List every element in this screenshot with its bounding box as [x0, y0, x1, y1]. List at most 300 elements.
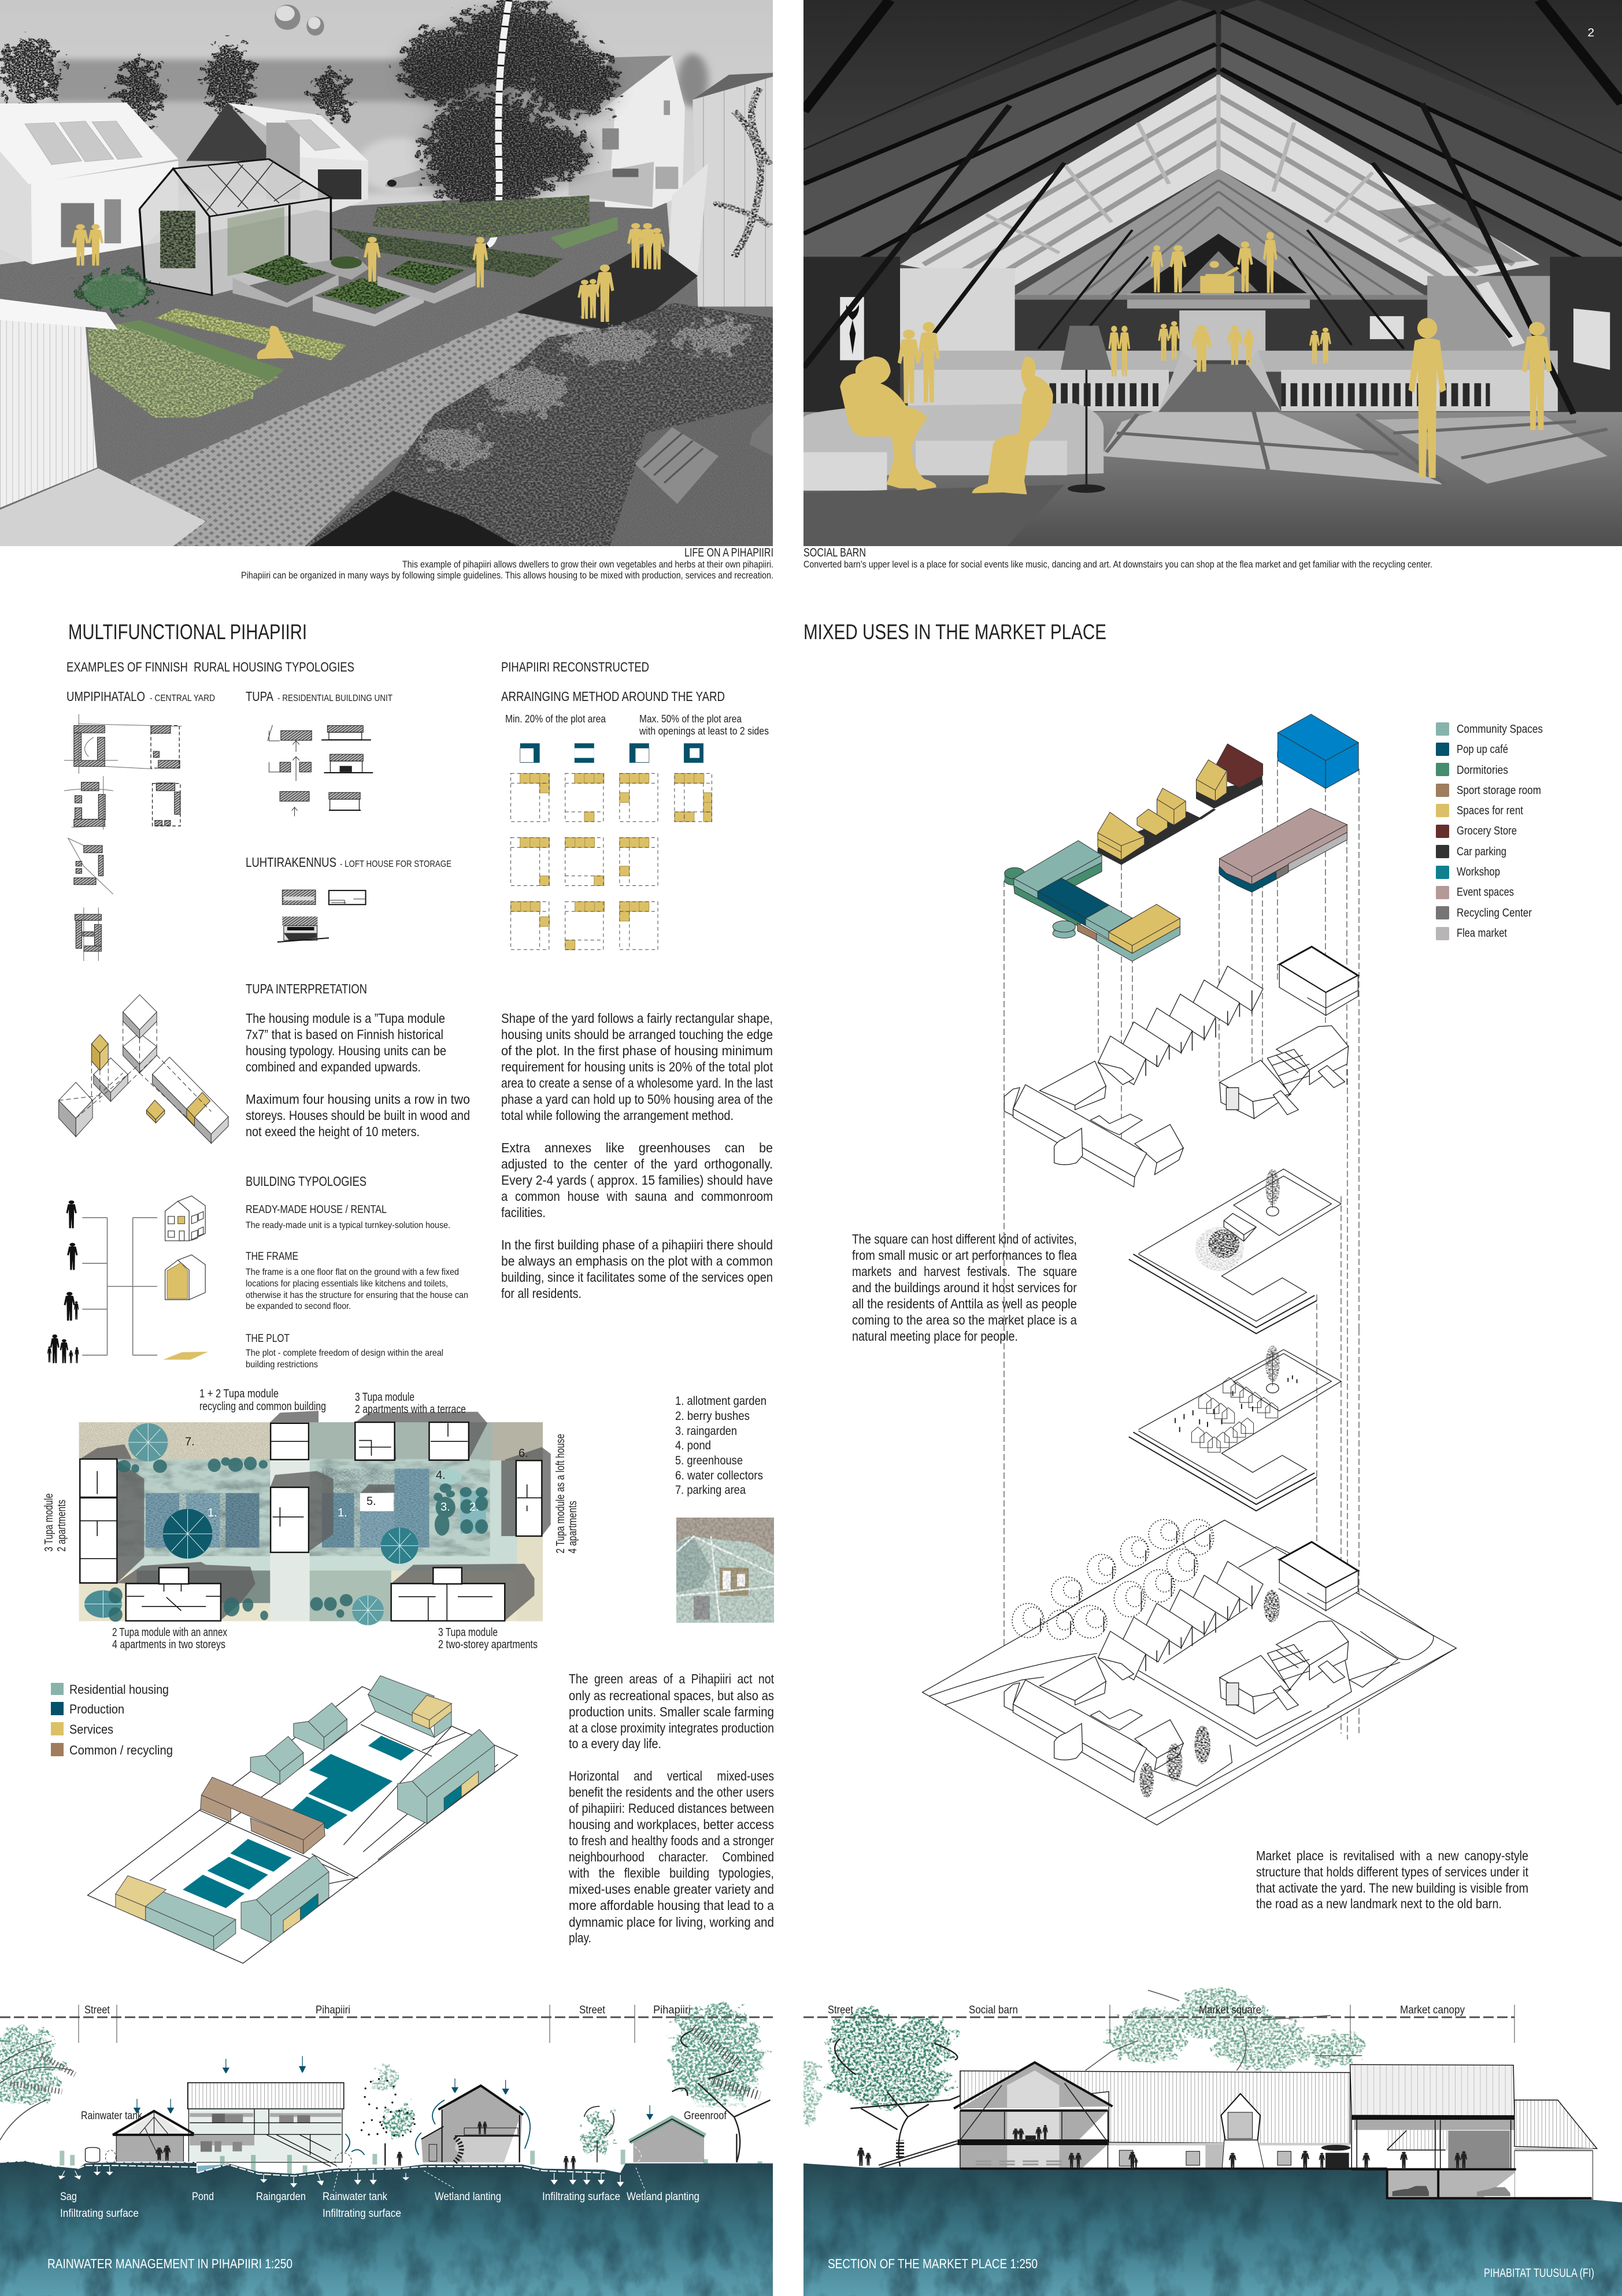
caption: social barn: Converted barn’s upper level is a place for social events like music, dancing and art. At downstairs you can shop at the flea market and get familiar with the recycling center.	[803, 559, 1432, 570]
site plan labels: recycling and common building	[199, 1400, 326, 1413]
text: shape of the yard: be always an emphasis on the plot with a common	[501, 1253, 773, 1268]
lawn	[0, 199, 773, 546]
site plan labels: 4 apartments in two storeys	[112, 1638, 225, 1651]
site plan labels: 4 apartments	[566, 1501, 579, 1553]
site plan labels: 4.	[436, 1469, 446, 1482]
right roof and wall	[1514, 2100, 1597, 2199]
heading: umpipihatalo	[66, 689, 215, 704]
caption: life on a pihapiiri	[241, 546, 773, 581]
gable house	[421, 2086, 523, 2163]
pond	[198, 2164, 225, 2173]
text: green areas: Horizontal and vertical mixed-uses	[569, 1768, 774, 1783]
shrubs	[305, 303, 773, 546]
site plan key: 6. water collectors	[675, 1469, 763, 1482]
trees	[84, 1423, 419, 1625]
site plan labels: 2 apartments	[55, 1500, 68, 1552]
cypress trees	[1139, 1590, 1280, 1798]
site plan key: 1. allotment garden	[675, 1394, 766, 1408]
section labels: right: Social barn	[969, 2004, 1018, 2016]
text: market place: Market place is revitalised with a new canopy-style	[1256, 1848, 1528, 1863]
heading: arranging method: ARRAINGING METHOD AROUND THE YARD	[501, 689, 725, 704]
greenhouse	[360, 1493, 394, 1511]
site plan key: 4. pond	[675, 1439, 711, 1452]
text: shape of the yard: requirement for housing units is 20% of the total plot	[501, 1059, 773, 1074]
text: ready-made	[246, 1204, 450, 1230]
text: shape of the yard: building, since it facilitates some of the services open	[501, 1270, 773, 1285]
main building	[188, 2083, 344, 2167]
pop up cafe: Pop up café	[1457, 743, 1508, 756]
text: green areas: to a every day life.	[569, 1736, 661, 1751]
section labels: left: Street	[579, 2004, 606, 2016]
recycling center	[1436, 906, 1532, 919]
section labels: right: Market canopy	[1400, 2004, 1465, 2016]
middle tree	[361, 2067, 417, 2165]
text: the square: coming to the area so the market place is a	[852, 1312, 1077, 1327]
common recycling: Common / recycling	[69, 1743, 173, 1757]
production: Production	[69, 1702, 124, 1716]
section labels: left: Infiltrating surface	[60, 2208, 139, 2220]
site plan labels: 2 Tupa module as a loft house	[554, 1434, 567, 1553]
flea market: Flea market	[1457, 927, 1507, 940]
residential top	[146, 1676, 495, 1950]
dashed callouts	[105, 2150, 646, 2193]
site plan key: 7. parking area	[675, 1483, 746, 1497]
caption: social barn	[803, 546, 1432, 570]
text: housing module: 7x7” that is based on Finnish historical	[246, 1027, 443, 1042]
text: market place: structure that holds different types of services under it	[1256, 1864, 1529, 1879]
people	[397, 2152, 576, 2170]
production areas	[183, 1736, 414, 1908]
text: the frame: be expanded to second floor.	[246, 1301, 351, 1311]
section labels: left: RAINWATER MANAGEMENT IN PIHAPIIRI 1:250	[47, 2256, 292, 2271]
left tree	[0, 2026, 75, 2140]
site plan key	[675, 1394, 766, 1497]
site plan labels: 3 Tupa module	[438, 1626, 498, 1639]
site plan	[79, 1411, 551, 1625]
structures	[1004, 1542, 1358, 1782]
text: shape of the yard: area to create a sense of a wholesome yard. In the last	[501, 1075, 773, 1090]
services	[116, 1695, 479, 1933]
caption: social barn: SOCIAL BARN	[803, 546, 866, 559]
text: shape of the yard: Extra annexes like greenhouses can be	[501, 1140, 773, 1155]
text: shape of the yard: facilities.	[501, 1205, 546, 1220]
heading: tupa: TUPA	[246, 689, 274, 704]
site plan key: 2. berry bushes	[675, 1410, 750, 1423]
back garden planting	[331, 195, 618, 278]
ground white line	[0, 2161, 605, 2176]
text: the frame: otherwise it has the structure for ensuring that the house can	[246, 1290, 468, 1300]
balloons	[275, 5, 324, 36]
birch tree	[401, 0, 618, 246]
site plan labels: 2 two-storey apartments	[438, 1638, 538, 1651]
text: shape of the yard: total while following the arrangement method.	[501, 1108, 734, 1123]
paved path	[129, 312, 615, 546]
small trees	[109, 1457, 488, 1622]
text: green areas: more affordable housing that lead to a	[569, 1898, 774, 1913]
text: the square: and the buildings around it host services for	[852, 1280, 1077, 1295]
heading: luhtirakennus	[246, 855, 451, 870]
residential housing: Residential housing	[69, 1682, 169, 1697]
text: green areas: neighbourhood character. Combined	[569, 1849, 774, 1864]
big tree right	[669, 2003, 771, 2163]
section labels: left: Rainwater tank	[81, 2110, 142, 2122]
section labels: right: SECTION OF THE MARKET PLACE 1:250	[828, 2256, 1038, 2271]
text: market place	[1256, 1848, 1529, 1911]
text: housing module: housing typology. Housing units can be	[246, 1043, 446, 1058]
stalls	[1191, 1378, 1278, 1452]
background tree	[1086, 1988, 1362, 2071]
roof rafters	[803, 0, 1622, 273]
barn wall	[1109, 2143, 1350, 2169]
square slab	[1129, 1349, 1341, 1511]
text: the square: natural meeting place for people.	[852, 1329, 1018, 1344]
text: the frame: THE FRAME	[246, 1251, 298, 1263]
text: the square: markets and harvest festivals. The square	[852, 1264, 1077, 1279]
text: shape of the yard: a common house with sauna and commonroom	[501, 1189, 773, 1204]
text: green areas: mixed-uses enable greater variety and	[569, 1882, 774, 1897]
heading: typologies: EXAMPLES OF FINNISH RURAL HOUSING TYPOLOGIES	[66, 659, 354, 674]
heading: building typologies: BUILDING TYPOLOGIES	[246, 1174, 366, 1189]
central walkway	[1158, 364, 1281, 412]
section labels: left: Pond	[192, 2191, 214, 2203]
title: multifunctional pihapiiri: MULTIFUNCTIONAL PIHAPIIRI	[68, 620, 307, 644]
section: rainwater management	[0, 2001, 1622, 2296]
text: shape of the yard: for all residents.	[501, 1286, 582, 1301]
roof planes	[803, 0, 1622, 273]
section labels: left: Street	[84, 2004, 110, 2016]
tree with seat	[1265, 1346, 1280, 1393]
title: mixed uses: MIXED USES IN THE MARKET PLACE	[803, 620, 1106, 644]
text: shape of the yard: Shape of the yard follows a fairly rectangular shape,	[501, 1011, 773, 1026]
site plan labels: 5.	[366, 1495, 376, 1508]
site plan labels: 3 Tupa module	[43, 1493, 55, 1552]
rhubarb plant	[80, 272, 150, 311]
site plan labels	[43, 1388, 579, 1651]
text: the square: from small music or art performances to flea	[852, 1248, 1077, 1263]
note: min 20%: Min. 20% of the plot area	[505, 713, 606, 725]
site plan labels: 7.	[185, 1436, 195, 1448]
axonometric: pihapiiri uses	[88, 1676, 517, 1963]
grocery	[1436, 825, 1517, 838]
page number: 2	[1587, 26, 1594, 39]
note: max 50%: Max. 50% of the plot area	[639, 713, 742, 725]
trees	[1012, 1519, 1214, 1640]
railings	[908, 351, 1558, 412]
dormitories	[1436, 763, 1508, 777]
text: the square	[852, 1232, 1077, 1344]
workshop	[1436, 866, 1500, 879]
workshop: Workshop	[1457, 866, 1500, 878]
square slab	[1129, 1169, 1341, 1334]
text: green areas: benefit the residents and the other users	[569, 1785, 774, 1800]
sketches: loft house	[277, 890, 366, 942]
caption: life on a pihapiiri: Pihapiiri can be organized in many ways by following simple guidelines. This allows housing to be mixed with production, services and recreation.	[241, 570, 773, 581]
right wooden buildings	[668, 73, 773, 307]
key map	[676, 1518, 774, 1623]
car parking: Car parking	[1457, 845, 1506, 858]
axonometric: coloured program volumes	[1005, 714, 1358, 961]
plot diagrams: blue coverage squares	[520, 743, 703, 763]
community spaces	[1436, 722, 1543, 736]
section labels: left: Sag	[60, 2191, 77, 2203]
heading: luhtirakennus: LUHTIRAKENNUS	[246, 855, 336, 870]
text: housing module: Maximum four housing units a row in two	[246, 1092, 470, 1107]
section: market place	[803, 1986, 1622, 2296]
text: shape of the yard: In the first building phase of a pihapiiri there should	[501, 1237, 773, 1252]
frame house	[165, 1255, 205, 1300]
section labels: left: Wetland lanting	[435, 2191, 501, 2203]
garden plots	[146, 1469, 486, 1548]
section labels: left: Wetland planting	[627, 2191, 699, 2203]
long barn roof	[960, 2071, 1350, 2144]
text: shape of the yard	[501, 1011, 773, 1301]
photo: social barn	[803, 0, 1622, 546]
caption: life on a pihapiiri: LIFE ON A PIHAPIIRI	[684, 546, 773, 559]
floor lamp	[1061, 326, 1112, 493]
sketches: tupa plans and elevations	[268, 725, 373, 816]
inner roof	[1015, 169, 1425, 295]
pop up cafe	[1436, 743, 1508, 756]
text: green areas: at a close proximity integrates production	[569, 1720, 774, 1735]
diagonal braces	[803, 103, 1573, 414]
text: market place: that activate the yard. The new building is visible from	[1256, 1880, 1528, 1896]
buildings	[80, 1422, 542, 1621]
crowd	[1195, 1227, 1244, 1271]
section labels: left: Infiltrating surface	[542, 2191, 620, 2203]
heading: umpipihatalo: UMPIPIHATALO	[66, 689, 145, 704]
section labels: left: Infiltrating surface	[323, 2208, 401, 2220]
dark plaza	[517, 242, 698, 332]
site plan key: 3. raingarden	[675, 1425, 737, 1438]
blue workshop box	[1277, 714, 1358, 788]
bench	[635, 412, 773, 504]
spaces for rent	[1436, 804, 1523, 817]
art posters	[840, 297, 1610, 370]
section labels: left: Pihapiiri	[316, 2004, 350, 2016]
sketches: umpipihatalo plans	[64, 714, 182, 961]
ready-made house	[165, 1196, 205, 1241]
text: green areas: housing and workplaces, better access	[569, 1817, 774, 1832]
text: the plot: THE PLOT	[246, 1333, 290, 1345]
text: ready-made: READY-MADE HOUSE / RENTAL	[246, 1204, 387, 1216]
text: green areas: production units. Smaller scale farming	[569, 1704, 774, 1719]
soil	[0, 2161, 773, 2296]
reference line	[803, 2016, 1514, 2018]
axonometric: market square with crowd	[1129, 1169, 1341, 1334]
rug	[803, 485, 1065, 546]
section labels: left: Greenroof	[684, 2110, 727, 2122]
dormitories: Dormitories	[1457, 764, 1508, 777]
site plan labels: 1.	[338, 1507, 347, 1519]
text: the plot: The plot - complete freedom of design within the areal	[246, 1348, 443, 1358]
lower walls and windows	[803, 257, 1622, 429]
dormer	[1221, 2094, 1264, 2169]
tree with seat	[1265, 1169, 1280, 1216]
vegetable plots	[88, 309, 346, 418]
floor	[803, 402, 1622, 546]
text: shape of the yard: phase a yard can hold up to 50% housing area of the	[501, 1092, 773, 1107]
section labels: right	[803, 2004, 1594, 2280]
heading: luhtirakennus: - LOFT HOUSE FOR STORAGE	[340, 859, 451, 869]
site ground	[79, 1422, 543, 1621]
section labels: left: Raingarden	[256, 2191, 306, 2203]
infiltration arrows	[57, 2167, 624, 2187]
text: the plot	[246, 1333, 443, 1370]
sofa	[803, 403, 1103, 491]
common / recycling	[201, 1777, 325, 1854]
car	[86, 2147, 100, 2163]
heading: reconstructed: PIHAPIIRI RECONSTRUCTED	[501, 659, 649, 674]
spaces for rent: Spaces for rent	[1457, 804, 1523, 817]
text: green areas: dymnamic place for living, working and	[569, 1915, 774, 1930]
note: max 50%	[639, 713, 769, 737]
connector lines	[82, 1218, 157, 1355]
section labels: right: Street	[828, 2004, 854, 2016]
text: green areas: play.	[569, 1930, 591, 1945]
rental pavilions on parking	[1098, 744, 1263, 865]
skylight	[900, 75, 1539, 285]
site plan labels: 1.	[208, 1507, 217, 1519]
flea market	[1436, 927, 1507, 940]
services	[51, 1722, 113, 1737]
text: market place: the road as a new landmark next to the old barn.	[1256, 1896, 1502, 1911]
car parking	[1436, 845, 1506, 858]
event spaces: Event spaces	[1457, 886, 1514, 899]
text: green areas: to fresh and healthy foods and a stronger	[569, 1833, 774, 1848]
white house left	[0, 103, 179, 265]
text: shape of the yard: housing units should be arranged touching the edge	[501, 1027, 773, 1042]
small tree	[584, 2106, 614, 2163]
event spaces	[1436, 886, 1514, 899]
foreground tree	[829, 2007, 960, 2167]
text: green areas: with the flexible building typologies,	[568, 1865, 774, 1880]
text: housing module: The housing module is a ”Tupa module	[246, 1011, 445, 1026]
section labels: left	[0, 2004, 773, 2271]
silhouettes	[47, 1200, 79, 1363]
back house	[434, 55, 685, 209]
diagram: tupa module cubes	[59, 995, 228, 1143]
car	[385, 168, 437, 188]
site plan labels: 3.	[440, 1501, 450, 1514]
text: green areas: The green areas of a Pihapiiri act not	[569, 1671, 775, 1686]
recycling center: Recycling Center	[1457, 907, 1532, 919]
reeds	[62, 2150, 760, 2174]
raised beds	[232, 255, 476, 327]
text: green areas	[568, 1671, 775, 1945]
sport storage: Sport storage room	[1457, 784, 1541, 797]
text: shape of the yard: of the plot. In the first phase of housing minimum	[501, 1043, 773, 1058]
axonometric: buildings wireframe layer	[1004, 947, 1358, 1187]
section labels: left: Rainwater tank	[323, 2191, 387, 2203]
heading: tupa	[246, 689, 392, 704]
far left tree	[788, 2060, 819, 2123]
sport storage	[1436, 784, 1541, 797]
visitors	[1175, 1375, 1297, 1432]
plot diagrams: yellow arrangements	[511, 773, 712, 950]
text: housing module	[246, 1011, 470, 1139]
site plan labels: 2 apartments with a terrace	[355, 1403, 466, 1416]
heading: tupa: - RESIDENTIAL BUILDING UNIT	[277, 693, 392, 703]
section labels: left: Pihapiiri	[653, 2004, 691, 2016]
people silhouettes	[857, 2125, 1467, 2169]
end wall dark gable	[1127, 234, 1310, 295]
site plan labels: 1 + 2 Tupa module	[199, 1388, 279, 1400]
heading: umpipihatalo: - CENTRAL YARD	[150, 693, 215, 703]
site plan labels: 2 Tupa module with an annex	[112, 1626, 227, 1639]
conifers	[2, 38, 347, 125]
text: ready-made: The ready-made unit is a typical turnkey-solution house.	[246, 1221, 450, 1230]
legend: market place uses	[1436, 722, 1543, 940]
text: the frame: The frame is a one floor flat on the ground with a few fixed	[246, 1267, 459, 1277]
note: max 50%: with openings at least to 2 sides	[639, 725, 769, 737]
event spaces slab	[1219, 808, 1347, 892]
site plan labels: 2.	[469, 1501, 479, 1514]
text: the square: all the residents of Anttila as well as people	[852, 1296, 1077, 1311]
event pavilion	[1224, 1214, 1256, 1241]
plot	[163, 1352, 208, 1360]
axonometric: market square with stalls	[1129, 1346, 1341, 1511]
market benches	[976, 2161, 1062, 2164]
text: housing module: storeys. Houses should be built in wood and	[246, 1108, 470, 1123]
text: the frame: locations for placing essentials like kitchens and toilets,	[246, 1279, 448, 1289]
annex with truss	[113, 2111, 194, 2162]
soil	[803, 2164, 1622, 2296]
heading: tupa interpretation: TUPA INTERPRETATION	[246, 981, 367, 996]
blurred forest	[0, 54, 708, 194]
text: green areas: of pihapiiri: Reduced distances between	[569, 1801, 774, 1816]
social barn section	[879, 2063, 1113, 2169]
site	[923, 1520, 1456, 1825]
site plan labels: 6.	[519, 1447, 528, 1460]
grocery: Grocery Store	[1457, 825, 1517, 837]
community spaces: Community Spaces	[1457, 723, 1543, 736]
site plan key: 5. greenhouse	[675, 1454, 743, 1467]
text: the frame	[246, 1251, 468, 1311]
text: shape of the yard: Every 2-4 yards ( approx. 15 families) should have	[501, 1173, 773, 1188]
front white building	[0, 299, 206, 546]
production	[51, 1702, 124, 1716]
white house with chimney	[186, 103, 368, 213]
plot outline	[88, 1687, 517, 1963]
axonometric: complete market place	[923, 1519, 1456, 1825]
legend: pihapiiri uses	[51, 1682, 173, 1757]
reference line	[0, 2016, 773, 2018]
services: Services	[69, 1722, 113, 1737]
text: housing module: combined and expanded upwards.	[246, 1059, 421, 1074]
roof rain arrows	[134, 2056, 653, 2155]
text: green areas: only as recreational spaces, but also as	[569, 1688, 774, 1703]
text: the square: The square can host different kind of activites,	[852, 1232, 1077, 1247]
gold silhouettes barn	[840, 232, 1552, 494]
canopy	[1350, 2064, 1514, 2169]
community building	[1005, 841, 1180, 961]
section labels: right: Market square	[1199, 2004, 1261, 2016]
greenhouse gable	[629, 2118, 705, 2164]
site plan labels: 3 Tupa module	[355, 1391, 414, 1404]
text: shape of the yard: adjusted to the center of the yard orthogonally.	[501, 1156, 773, 1171]
diagram: people to building types	[47, 1196, 208, 1363]
parking basement	[960, 2169, 1592, 2198]
gold figures	[72, 223, 665, 359]
photo: life on a pihapiiri	[0, 0, 773, 546]
caption: life on a pihapiiri: This example of pihapiiri allows dwellers to grow their own vegetables and herbs at their own pihapiiri.	[402, 559, 773, 570]
greenhouse	[139, 159, 331, 295]
interior walls	[80, 1423, 542, 1620]
section labels: right: PIHABITAT TUUSULA (FI)	[1484, 2267, 1594, 2280]
text: the plot: building restrictions	[246, 1360, 318, 1370]
text: housing module: not exeed the height of 10 meters.	[246, 1124, 420, 1139]
exploded axonometric: dashed guides	[1004, 751, 1359, 1739]
